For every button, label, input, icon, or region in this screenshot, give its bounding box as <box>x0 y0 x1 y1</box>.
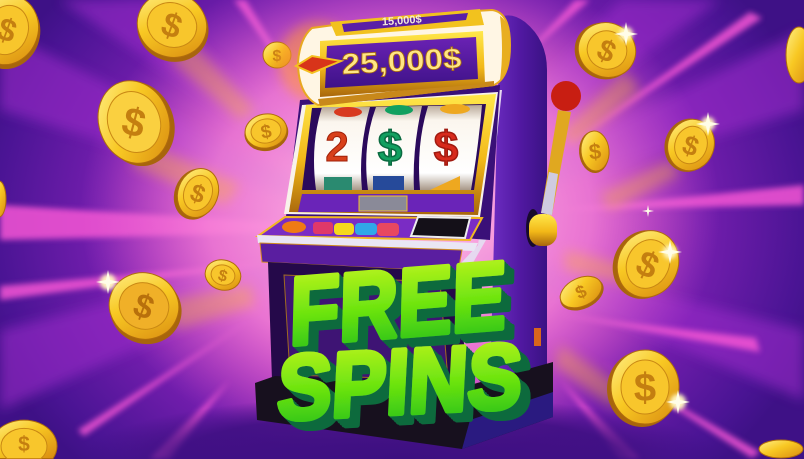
button red <box>377 223 399 236</box>
reels: $ <box>378 123 402 172</box>
coin trails <box>130 40 680 410</box>
coin <box>263 42 291 68</box>
FREE: FREE <box>288 242 508 366</box>
lever socket <box>526 209 540 247</box>
coin: $ <box>156 5 187 47</box>
marquee frame <box>320 31 485 97</box>
cylinder right cap <box>500 16 510 80</box>
button orange <box>282 221 306 233</box>
coin <box>167 162 225 226</box>
dark floor glow <box>80 399 720 459</box>
partial symbols bottom <box>324 177 352 190</box>
button pink <box>313 222 333 234</box>
FREE SPINS title <box>275 242 525 440</box>
sparkle stars <box>96 22 720 414</box>
coin <box>577 130 611 174</box>
coin <box>98 263 192 354</box>
top cylinder <box>298 10 510 105</box>
button deck <box>258 217 482 240</box>
coin slot <box>411 217 470 238</box>
buttons <box>282 221 399 236</box>
coin <box>0 181 6 217</box>
coin: $ <box>588 139 602 164</box>
coin <box>759 440 803 458</box>
coin <box>87 69 186 177</box>
red gem pointer <box>296 56 341 73</box>
cylinder lower band <box>318 81 494 106</box>
orange side light <box>534 328 541 346</box>
coin: $ <box>678 129 703 163</box>
coin <box>602 219 690 310</box>
top panel <box>330 9 484 36</box>
machine base <box>255 362 553 449</box>
lower cabinet header <box>260 243 462 272</box>
reel 2 <box>366 106 422 190</box>
coin: $ <box>592 33 621 70</box>
chrome ledge <box>257 235 478 251</box>
coin: $ <box>630 242 666 287</box>
reel 3 <box>419 105 482 190</box>
coin sparkle glows <box>100 27 715 410</box>
reel bezel <box>284 92 498 217</box>
machine front upper <box>285 85 500 240</box>
base front blue strip <box>462 392 553 449</box>
partial symbols top <box>334 107 362 117</box>
coin: $ <box>216 267 229 286</box>
coin <box>127 0 219 72</box>
lever rod chrome <box>541 172 558 215</box>
coin: $ <box>186 178 209 210</box>
coin <box>0 420 57 458</box>
lever rod <box>541 110 571 215</box>
coin <box>657 112 722 179</box>
info panel under reels <box>298 194 474 212</box>
coin: $ <box>572 281 590 303</box>
halo behind cylinder <box>278 22 358 102</box>
reel bezel gold <box>289 94 496 215</box>
coin: $ <box>128 286 159 328</box>
machine side panel <box>490 15 547 385</box>
coin <box>241 110 291 155</box>
reel symbols: 2 <box>325 123 349 170</box>
jackpot amount: 25,000$ <box>341 43 462 81</box>
SPINS: SPINS <box>275 323 525 440</box>
slot machine <box>255 9 581 449</box>
coin: $ <box>634 366 656 410</box>
top amount: 15,000$ <box>382 14 422 28</box>
coin <box>607 350 679 427</box>
lever base <box>529 214 557 246</box>
cabinet inset <box>284 275 448 380</box>
reels <box>314 104 482 190</box>
lower cabinet <box>268 262 468 385</box>
coin: $ <box>117 99 150 147</box>
lever knob <box>551 81 581 111</box>
reels: $ <box>434 123 458 172</box>
side chrome strip <box>462 90 502 275</box>
coin <box>554 270 609 317</box>
coin: $ <box>18 433 30 456</box>
reel 1 <box>314 107 370 190</box>
coin <box>0 0 51 78</box>
coin <box>565 12 645 89</box>
coin <box>786 27 804 83</box>
reel window <box>302 104 486 190</box>
button blue <box>355 223 377 235</box>
button yellow <box>334 223 354 235</box>
coin: $ <box>273 48 282 65</box>
marquee panel <box>325 37 478 88</box>
top panel inner <box>342 13 468 32</box>
coin <box>202 256 244 294</box>
meter panel <box>359 196 407 211</box>
coin: $ <box>259 121 274 144</box>
